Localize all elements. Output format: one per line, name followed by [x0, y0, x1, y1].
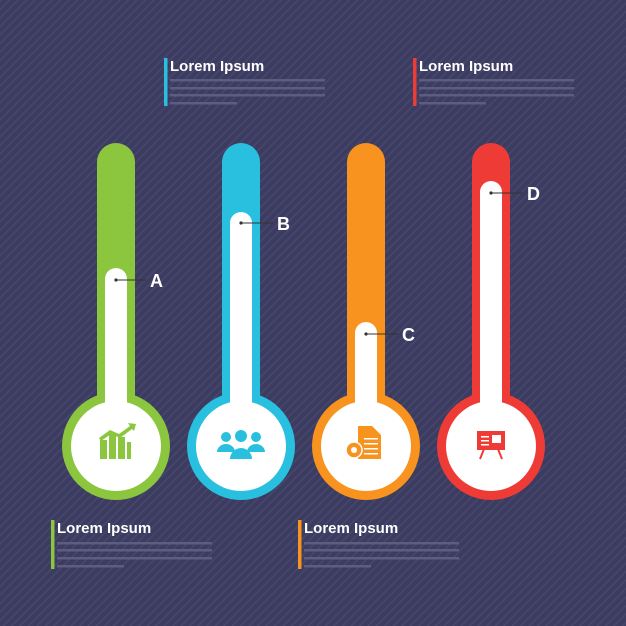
thermometer A: green: A [150, 271, 163, 291]
icon: people [217, 430, 265, 459]
text block: bottom left [51, 520, 212, 569]
icon: presentation board [478, 432, 504, 459]
thermometer D: red [437, 143, 545, 500]
text block: top left: Lorem Ipsum [170, 58, 264, 75]
icon: growth chart [99, 423, 136, 459]
text block: top left [164, 58, 325, 106]
thermometer B: blue [187, 143, 295, 500]
text block: bottom right [298, 520, 459, 569]
icon: document with gear [346, 426, 381, 459]
thermometer D: red: D [527, 184, 540, 204]
thermometer C: orange [312, 143, 420, 500]
text block: top right [413, 58, 574, 106]
thermometer A: green [62, 143, 170, 500]
thermometer C: orange: C [402, 325, 415, 345]
text block: top right: Lorem Ipsum [419, 58, 513, 75]
thermometer B: blue: B [277, 214, 290, 234]
text block: bottom left: Lorem Ipsum [57, 520, 151, 537]
text block: bottom right: Lorem Ipsum [304, 520, 398, 537]
